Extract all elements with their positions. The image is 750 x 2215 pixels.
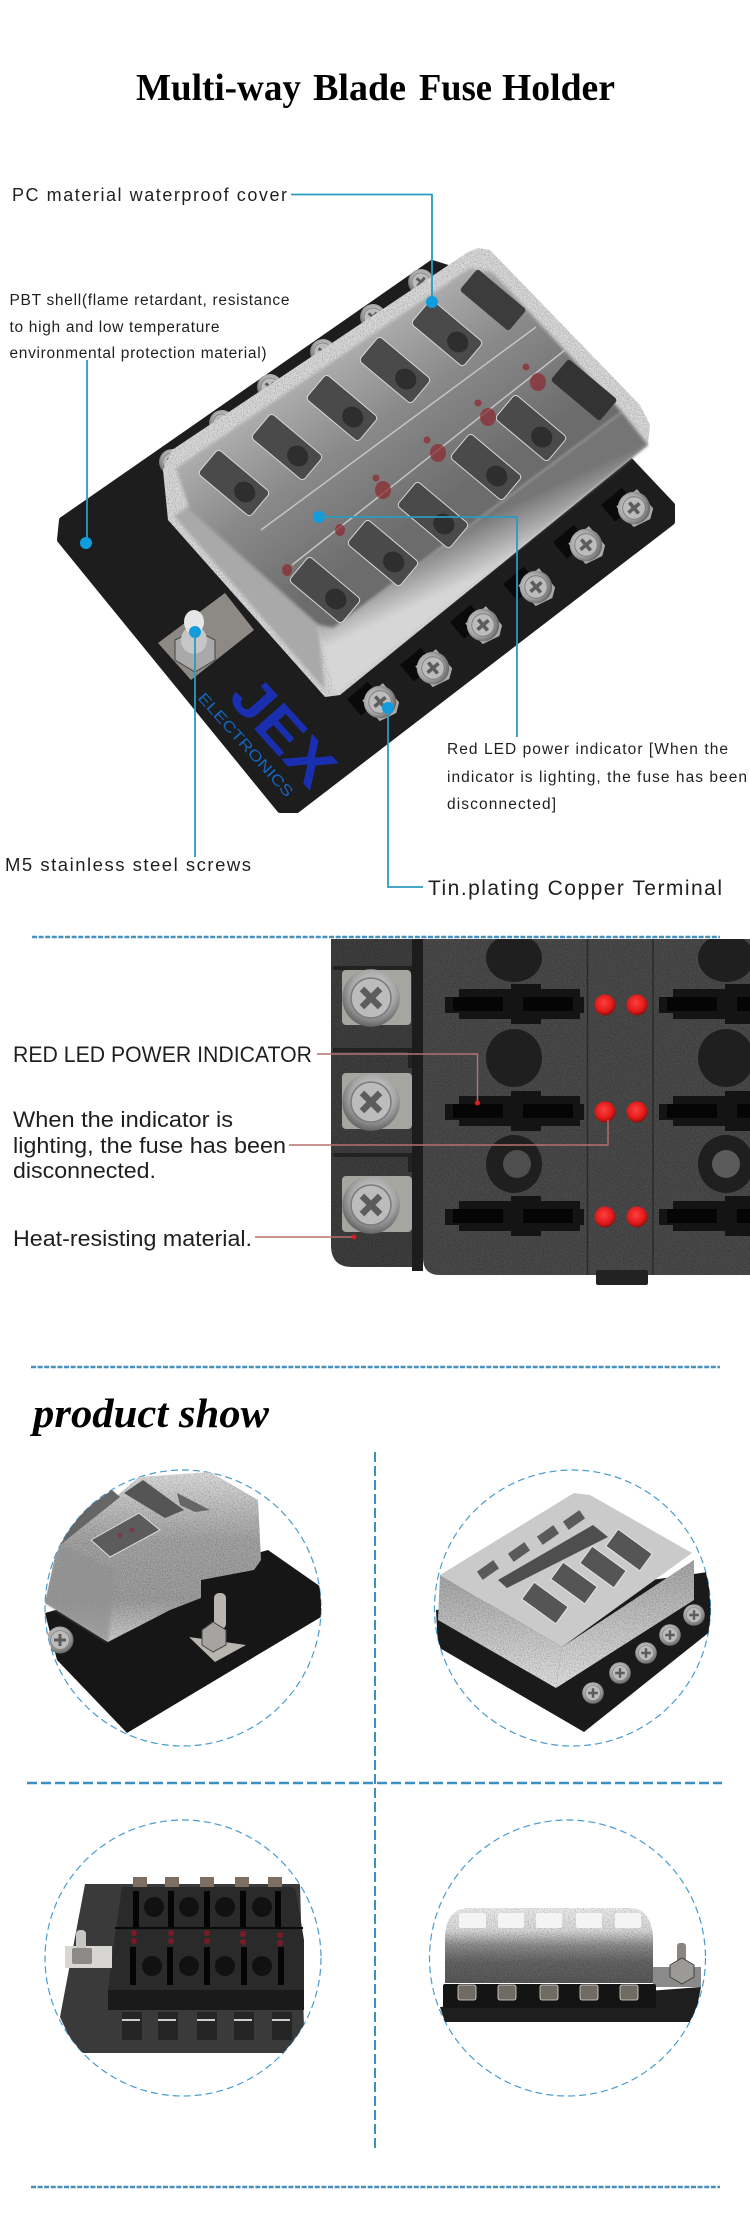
product view 3: open holder [45, 1820, 321, 2096]
base [60, 1884, 304, 2053]
base [45, 1550, 321, 1733]
terminals [582, 1604, 705, 1704]
label: heat resisting material [13, 1226, 356, 1251]
label: indicator explanation [13, 1107, 608, 1183]
fuse slots [445, 984, 750, 1236]
cover [438, 1575, 562, 1688]
title: Fuse [419, 67, 492, 109]
base plate [440, 1987, 701, 2022]
slots [130, 1891, 284, 1985]
red LEDs seen through cover [282, 364, 546, 576]
callout: PBT shell: PBT shell(flame retardant, resistance [10, 292, 290, 309]
close-up photo: LED strip [330, 934, 750, 1285]
stud [189, 1637, 246, 1662]
callout: red LED: Red LED power indicator [When the [447, 741, 728, 758]
title [136, 67, 615, 109]
upper terminals [154, 264, 439, 480]
title: Blade [313, 67, 406, 109]
product view 2 [434, 1470, 712, 1746]
heading: product show: product show [30, 1390, 270, 1436]
top tabs [133, 1877, 282, 1887]
title: Holder [502, 67, 615, 109]
screw terminals [342, 969, 412, 1234]
callout: PBT shell: to high and low temperature [10, 319, 220, 336]
product view 1 [45, 1470, 321, 1746]
plugging holes [486, 934, 750, 1193]
lower terminals [347, 480, 659, 732]
main panel [423, 939, 750, 1275]
terminal block [443, 1984, 656, 2008]
terminals [458, 1985, 638, 2000]
label: red LED power indicator [13, 1042, 480, 1106]
label: indicator explanation: disconnected. [13, 1158, 156, 1183]
label: indicator explanation: When the indicator is [13, 1107, 233, 1132]
callout: M5 screws [5, 626, 251, 875]
holes [142, 1897, 272, 1976]
callout: M5 screws: M5 stainless steel screws [5, 854, 251, 875]
base [436, 1572, 712, 1732]
callout: copper terminal [382, 702, 722, 900]
callout: red LED [313, 511, 747, 813]
transparent cover [163, 248, 650, 697]
red LEDs [594, 994, 648, 1228]
brand logo: ELECTRONICS [194, 690, 296, 801]
callout: PC cover [12, 185, 438, 308]
cover [45, 1472, 261, 1642]
base plate [60, 263, 672, 810]
M5 stud and plate [158, 593, 254, 680]
label: red LED power indicator: RED LED POWER INDICATOR [13, 1042, 312, 1067]
cover [445, 1908, 653, 1983]
bottom terminals [122, 2012, 292, 2040]
side terminal [46, 1626, 74, 1654]
brand logo [194, 649, 349, 809]
product view 4: side [430, 1820, 706, 2096]
label: indicator explanation: lighting, the fuse has been [13, 1133, 286, 1158]
terminal dividers [333, 968, 410, 1172]
fuse block [108, 1887, 304, 1990]
callout: red LED: indicator is lighting, the fuse has been [447, 769, 747, 786]
callout: PBT shell [10, 292, 290, 549]
title: Multi-way [136, 67, 301, 109]
left terminal strip [331, 939, 412, 1267]
LEDs [131, 1930, 283, 1946]
callout: red LED: disconnected] [447, 796, 556, 813]
callout: PBT shell: environmental protection material) [10, 345, 266, 362]
callout: copper terminal: Tin.plating Copper Terminal [428, 877, 722, 900]
stud [653, 1967, 701, 1987]
brand logo: JEX [217, 664, 349, 800]
fuse windows lower row [289, 359, 618, 624]
product photo: fuse holder with cover [60, 248, 672, 810]
stud [65, 1946, 112, 1968]
fuse windows upper row [198, 269, 527, 517]
label: heat resisting material: Heat-resisting material. [13, 1226, 252, 1251]
callout: PC cover: PC material waterproof cover [12, 185, 287, 205]
